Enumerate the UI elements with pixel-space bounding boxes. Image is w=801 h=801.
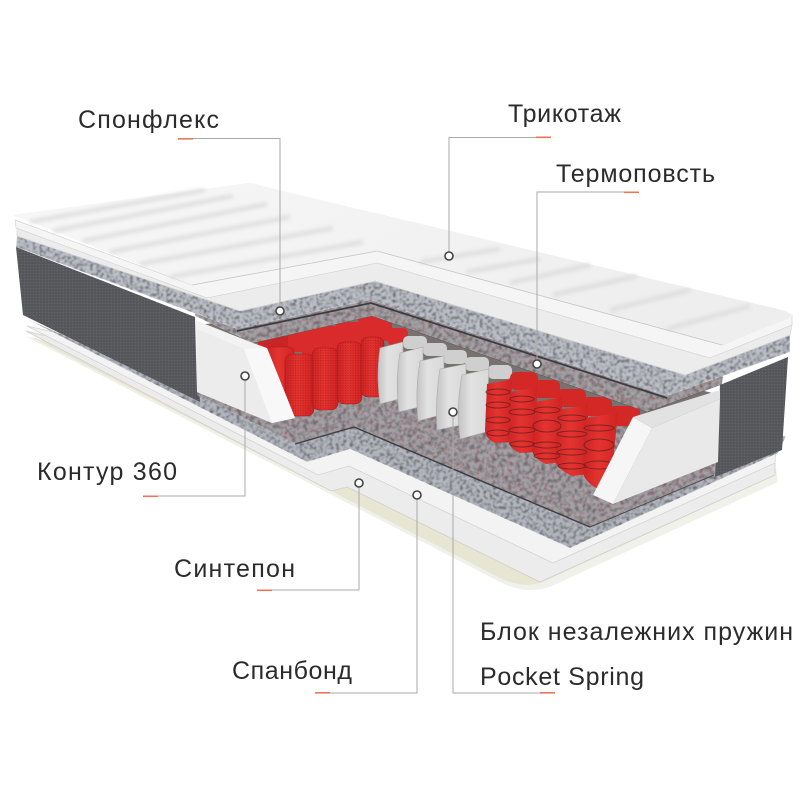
right fabric side panel [715,357,788,477]
pocket springs: front red columns with coils right [485,379,618,490]
bottom white spunbond layer [26,331,775,582]
thermo felt upper layer [195,285,724,412]
inner back wall [197,305,720,460]
mattress illustration [12,183,792,590]
top quilted knit layer [12,183,792,345]
upper white layer two [15,220,792,358]
floor felt with red flecks [197,370,716,527]
pocket springs: front red columns left [266,337,384,416]
label: Трикотаж: Трикотаж [508,100,621,128]
bottom grey felt layer [27,319,786,548]
label: Спанбонд: Спанбонд [232,657,352,685]
bottom cream base layer [25,336,778,590]
leader line: Контур 360 [143,372,249,497]
label: Контур 360: Контур 360 [37,458,177,486]
left foam perimeter block [195,320,295,423]
pocket springs: back white tops [403,336,512,379]
bottom white synthetic layer [27,326,776,563]
leader line: Спонфлекс [178,138,284,315]
left fabric side panel [16,247,200,402]
label: Термоповсть: Термоповсть [556,160,715,188]
dark shadow under spunflex [237,303,667,398]
label: Синтепон: Синтепон [174,555,295,583]
upper white layer three [17,226,792,375]
right foam perimeter block [593,390,720,504]
leader line: Блок незалежних пружин [449,408,555,694]
label: Pocket Spring: Pocket Spring [480,663,644,691]
leader line: Спанбонд [315,491,421,694]
pocket springs: back red tops left [258,316,408,358]
pocket springs: white columns [378,342,489,439]
label: Спонфлекс: Спонфлекс [78,106,219,134]
leader line: Трикотаж [445,136,551,260]
leader line: Синтепон [257,479,363,591]
pocket springs: back red tops right [510,372,640,426]
leader line: Термоповсть [533,192,639,368]
spunflex upper felt layer [16,236,790,396]
label: Блок незалежних пружин: Блок незалежних пружин [480,618,793,646]
